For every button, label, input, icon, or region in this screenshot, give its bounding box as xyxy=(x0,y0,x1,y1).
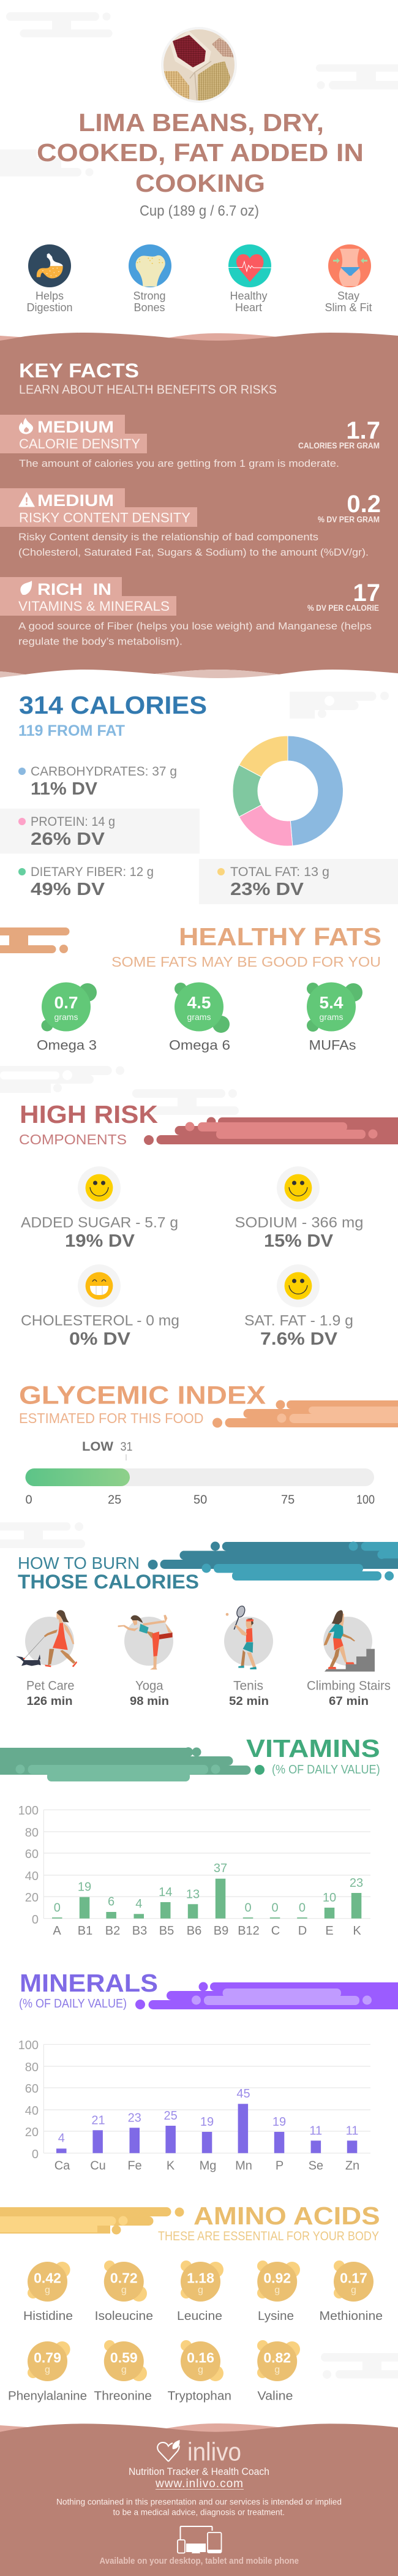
icon: leaf xyxy=(20,581,32,595)
benefit: stay slim and fit xyxy=(325,244,372,314)
heading: calories: 314 CALORIES xyxy=(19,691,207,719)
bar chart: vitamins: 37 xyxy=(214,1862,227,1875)
fact: calorie density: 1.7 xyxy=(346,417,380,444)
title: COOKED, FAT ADDED IN xyxy=(37,138,364,167)
legend: dietary fiber xyxy=(18,865,154,899)
bar chart: minerals: P xyxy=(276,2159,283,2173)
glycemic index gauge: 25 xyxy=(108,1494,121,1507)
section header: vitamins xyxy=(0,1734,380,1781)
bar chart: vitamins: 19 xyxy=(78,1881,91,1894)
title: COOKING xyxy=(135,169,265,197)
legend: dietary fiber: DIETARY FIBER: 12 g xyxy=(31,865,154,879)
amino acid: lysine xyxy=(257,2261,300,2323)
amino acid: tryptophan: 0.16 xyxy=(187,2350,214,2366)
risk: added sugar xyxy=(21,1166,178,1251)
amino acid: isoleucine: 0.72 xyxy=(110,2270,138,2286)
fact: rich in vitamins and minerals: regulate the body’s metabolism). xyxy=(18,636,182,647)
benefit: helps digestion xyxy=(26,244,73,314)
amino acid: leucine: 1.18 xyxy=(187,2270,214,2286)
risk: added sugar: ADDED SUGAR - 5.7 g xyxy=(21,1214,178,1231)
bar chart: vitamins: 60 xyxy=(25,1848,39,1861)
activity: tennis: 52 min xyxy=(229,1695,269,1708)
amino acid: lysine: Lysine xyxy=(258,2310,294,2323)
logo wordmark: inlivo xyxy=(187,2438,241,2466)
risk: cholesterol: 0% DV xyxy=(69,1329,131,1349)
title: LIMA BEANS, DRY, xyxy=(78,108,324,137)
glycemic index gauge: 100 xyxy=(356,1494,375,1507)
activity: climbing stairs: Climbing Stairs xyxy=(307,1679,391,1693)
fact: calorie density: The amount of calories you are getting from 1 gram is moderate. xyxy=(19,458,339,469)
legend: protein: PROTEIN: 14 g xyxy=(31,815,115,829)
fat: omega 3: 0.7 xyxy=(54,993,78,1012)
benefit: helps digestion: Helps xyxy=(36,290,64,302)
amino acid: phenylalanine: 0.79 xyxy=(34,2350,61,2366)
amino acid: isoleucine: g xyxy=(121,2285,127,2295)
section header: high risk components: COMPONENTS xyxy=(19,1131,127,1147)
risk: cholesterol xyxy=(21,1264,179,1349)
glycemic index gauge: LOW xyxy=(82,1440,113,1454)
bar chart: minerals: 19 xyxy=(200,2115,214,2129)
risk: sodium xyxy=(235,1166,364,1251)
fact: calorie density: MEDIUM xyxy=(37,418,114,436)
legend: protein: 26% DV xyxy=(31,829,105,849)
section header: glycemic index: ESTIMATED FOR THIS FOOD xyxy=(19,1410,203,1426)
legend: carbohydrates: 11% DV xyxy=(31,779,98,799)
title xyxy=(37,108,364,197)
activity: yoga xyxy=(118,1615,173,1708)
bar chart: vitamins: 0 xyxy=(244,1902,252,1915)
section header: amino acids xyxy=(0,2202,380,2243)
bar chart: vitamins: 4 xyxy=(135,1897,142,1911)
section header: high risk components: HIGH RISK xyxy=(20,1100,158,1128)
benefit: healthy heart: Heart xyxy=(235,301,262,314)
amino acid: leucine xyxy=(177,2261,223,2323)
fact: risky content density: (Cholesterol, Saturated Fat, Sugars & Sodium) to the amount (%DV/gr). xyxy=(18,546,369,558)
bar chart: vitamins: E xyxy=(325,1924,334,1938)
heading: key facts: KEY FACTS xyxy=(19,360,139,382)
bar chart: vitamins: 14 xyxy=(159,1886,172,1899)
bar chart: minerals: 100 xyxy=(18,2039,39,2052)
glycemic index gauge: 50 xyxy=(193,1494,207,1507)
glycemic index gauge: 75 xyxy=(281,1494,295,1507)
bar chart: vitamins: 100 xyxy=(18,1804,39,1818)
bar chart: vitamins: B6 xyxy=(187,1924,201,1938)
bar chart: minerals: K xyxy=(167,2159,175,2173)
activity: climbing stairs: 67 min xyxy=(329,1695,369,1708)
bar chart: vitamins: C xyxy=(271,1924,280,1938)
bar chart: vitamins: 0 xyxy=(32,1913,39,1927)
bar chart: vitamins: B1 xyxy=(78,1924,92,1938)
bar chart: minerals: 20 xyxy=(25,2126,39,2139)
icon: devices xyxy=(178,2526,222,2553)
amino acid: valine: g xyxy=(274,2365,280,2375)
fact: risky content density: Risky Content density is the relationship of bad components xyxy=(18,531,318,543)
fact: rich in vitamins and minerals xyxy=(0,577,380,647)
fat: omega 6: 4.5 xyxy=(187,993,211,1012)
bar chart: vitamins: B12 xyxy=(238,1924,260,1938)
activity: climbing stairs xyxy=(307,1610,391,1708)
section header: glycemic index xyxy=(19,1380,398,1427)
risk: cholesterol: CHOLESTEROL - 0 mg xyxy=(21,1313,179,1329)
bar chart: minerals xyxy=(18,2039,370,2173)
amino acid: methionine: 0.17 xyxy=(340,2270,367,2286)
bar chart: vitamins: A xyxy=(53,1924,61,1938)
fat: omega 6 xyxy=(169,983,230,1052)
fat: omega 6: Omega 6 xyxy=(169,1038,230,1052)
amino acid: histidine: g xyxy=(45,2285,50,2295)
fact: rich in vitamins and minerals: VITAMINS & MINERALS xyxy=(18,599,170,614)
fat: mufas xyxy=(307,983,362,1052)
legend: carbohydrates xyxy=(18,765,177,799)
risk: added sugar: 19% DV xyxy=(65,1231,135,1251)
bar chart: minerals: Zn xyxy=(345,2159,359,2173)
amino acid: leucine: Leucine xyxy=(177,2310,222,2323)
benefit: healthy heart xyxy=(228,244,271,314)
fact: rich in vitamins and minerals: 17 xyxy=(353,580,380,606)
legend: total fat: 23% DV xyxy=(230,880,304,899)
fat: omega 3: grams xyxy=(54,1012,78,1022)
risk: saturated fat xyxy=(244,1264,353,1349)
section header: how to burn those calories: HOW TO BURN xyxy=(18,1554,140,1573)
tagline: Nutrition Tracker & Health Coach xyxy=(129,2466,269,2477)
legend: dietary fiber: 49% DV xyxy=(31,880,105,899)
bar chart: minerals: Mn xyxy=(235,2159,252,2173)
bar chart: vitamins: D xyxy=(298,1924,307,1938)
risk: sodium: 15% DV xyxy=(264,1231,334,1251)
benefit: strong bones: Strong xyxy=(133,290,166,302)
legend: protein xyxy=(0,809,200,854)
amino acid: tryptophan xyxy=(168,2340,231,2403)
amino acid: lysine: g xyxy=(274,2285,280,2295)
activity: tennis: Tenis xyxy=(233,1679,263,1693)
bar chart: vitamins: 80 xyxy=(25,1826,39,1840)
legend: total fat: TOTAL FAT: 13 g xyxy=(230,865,329,879)
amino acid: isoleucine xyxy=(95,2261,153,2323)
glycemic index gauge xyxy=(26,1440,375,1507)
activity: yoga: Yoga xyxy=(135,1679,163,1693)
website link: www.inlivo.com xyxy=(155,2477,243,2490)
fact: rich in vitamins and minerals: RICH IN xyxy=(37,580,111,599)
fact: risky content density xyxy=(0,488,381,558)
amino acid: threonine: 0.59 xyxy=(110,2350,138,2366)
fact: risky content density: RISKY CONTENT DENSITY xyxy=(19,510,190,526)
activity: yoga: 98 min xyxy=(130,1695,169,1708)
icon: warning triangle xyxy=(18,492,35,507)
icon: smile xyxy=(86,1174,113,1201)
bar chart: vitamins: 20 xyxy=(25,1891,39,1905)
donut chart xyxy=(233,736,343,846)
amino acid: histidine: Histidine xyxy=(23,2310,73,2323)
amino acid: methionine xyxy=(320,2261,383,2323)
footer panel xyxy=(0,2423,398,2576)
bar chart: minerals: 60 xyxy=(25,2082,39,2096)
amino acid: valine xyxy=(257,2340,300,2403)
risk: sodium: SODIUM - 366 mg xyxy=(235,1214,364,1231)
bar chart: minerals: 23 xyxy=(128,2111,141,2125)
section header: healthy fats: HEALTHY FATS xyxy=(179,923,381,951)
icon: flame xyxy=(19,418,33,434)
amino acid: methionine: g xyxy=(351,2285,356,2295)
fact: risky content density: % DV PER GRAM xyxy=(318,515,380,524)
serving size: Cup (189 g / 6.7 oz) xyxy=(140,203,259,219)
activity: pet care: 126 min xyxy=(27,1695,72,1708)
glycemic index gauge: 31 xyxy=(120,1440,132,1454)
legend: carbohydrates: CARBOHYDRATES: 37 g xyxy=(31,765,177,779)
bar chart: minerals: 45 xyxy=(236,2087,250,2101)
amino acid: valine: Valine xyxy=(257,2389,293,2403)
bar chart: vitamins: B5 xyxy=(159,1924,174,1938)
amino acid: histidine: 0.42 xyxy=(34,2270,61,2286)
fat: mufas: 5.4 xyxy=(320,993,344,1012)
section header: how to burn those calories xyxy=(18,1541,398,1593)
fact: risky content density: 0.2 xyxy=(347,491,381,518)
section header: minerals: (% OF DAILY VALUE) xyxy=(19,1997,127,2011)
amino acid: isoleucine: Isoleucine xyxy=(95,2310,153,2323)
bar chart: minerals: 4 xyxy=(58,2132,65,2145)
benefit: stay slim and fit: Stay xyxy=(337,290,359,302)
bar chart: minerals: Fe xyxy=(127,2159,142,2173)
bar chart: minerals: 80 xyxy=(25,2061,39,2074)
availability note: Available on your desktop, tablet and mobile phone xyxy=(99,2556,299,2566)
fat: omega 6: grams xyxy=(187,1012,211,1022)
benefit: stay slim and fit: Slim & Fit xyxy=(325,301,372,314)
fact: risky content density: MEDIUM xyxy=(37,491,114,510)
bar chart: vitamins: 10 xyxy=(323,1891,336,1905)
amino acid: leucine: g xyxy=(198,2285,203,2295)
amino acid: tryptophan: Tryptophan xyxy=(168,2389,231,2403)
section header: vitamins: VITAMINS xyxy=(246,1734,380,1762)
amino acid: histidine xyxy=(23,2262,73,2323)
fat: omega 3 xyxy=(37,983,97,1052)
icon: inlivo heart logo xyxy=(157,2440,180,2461)
fact: rich in vitamins and minerals: % DV PER CALORIE xyxy=(307,603,379,613)
section header: minerals xyxy=(19,1969,398,2011)
section header: how to burn those calories: THOSE CALORIES xyxy=(18,1571,199,1593)
benefit: healthy heart: Healthy xyxy=(230,290,268,302)
bar chart: minerals: Se xyxy=(309,2159,323,2173)
bar chart: vitamins: K xyxy=(353,1924,361,1938)
bar chart: vitamins: 0 xyxy=(54,1902,61,1915)
amino acid: threonine: Threonine xyxy=(94,2389,152,2403)
fat: mufas: grams xyxy=(320,1012,343,1022)
fat: omega 3: Omega 3 xyxy=(37,1038,97,1052)
section header: healthy fats xyxy=(0,923,381,970)
disclaimer: Nothing contained in this presentation and our services is intended or implied xyxy=(56,2497,342,2507)
icon: smile xyxy=(285,1174,312,1201)
amino acid: phenylalanine xyxy=(8,2341,87,2403)
bar chart: vitamins xyxy=(18,1804,370,1938)
bar chart: minerals: 0 xyxy=(32,2148,39,2161)
bar chart: vitamins: 13 xyxy=(186,1887,200,1901)
risk: saturated fat: 7.6% DV xyxy=(260,1329,338,1349)
section header: vitamins: (% OF DAILY VALUE) xyxy=(272,1763,380,1777)
bar chart: vitamins: B2 xyxy=(105,1924,120,1938)
disclaimer xyxy=(56,2497,342,2517)
fact: calorie density: CALORIE DENSITY xyxy=(19,436,140,451)
bar chart: minerals: 19 xyxy=(272,2115,286,2129)
bar chart: vitamins: 0 xyxy=(299,1902,306,1915)
amino acid: threonine: g xyxy=(121,2365,127,2375)
section header: high risk components xyxy=(19,1100,398,1147)
fat: mufas: MUFAs xyxy=(309,1038,356,1052)
benefit: helps digestion: Digestion xyxy=(26,301,73,314)
bar chart: minerals: 21 xyxy=(91,2113,105,2127)
bar chart: vitamins: B9 xyxy=(214,1924,228,1938)
amino acid: threonine xyxy=(94,2340,152,2403)
panel: key facts xyxy=(0,333,398,678)
header photo: bags of beans xyxy=(161,27,237,103)
activity: pet care: Pet Care xyxy=(26,1679,75,1693)
amino acid: methionine: Methionine xyxy=(320,2310,383,2323)
amino acid: lysine: 0.92 xyxy=(263,2270,291,2286)
bar chart: minerals: 11 xyxy=(346,2125,358,2138)
bar chart: minerals: Ca xyxy=(54,2159,70,2173)
section header: amino acids: AMINO ACIDS xyxy=(193,2202,380,2230)
disclaimer: to be a medical advice, diagnosis or treatment. xyxy=(113,2507,285,2517)
icon: grin xyxy=(86,1272,113,1299)
amino acid: valine: 0.82 xyxy=(263,2350,291,2366)
section header: minerals: MINERALS xyxy=(20,1969,158,1997)
bar chart: vitamins: 0 xyxy=(271,1902,279,1915)
amino acid: tryptophan: g xyxy=(198,2365,203,2375)
fact: rich in vitamins and minerals: A good source of Fiber (helps you lose weight) and Manganese (helps xyxy=(18,620,372,632)
subheading: LEARN ABOUT HEALTH BENEFITS OR RISKS xyxy=(19,383,277,397)
benefit: strong bones xyxy=(129,244,171,314)
bar chart: minerals: 25 xyxy=(163,2109,178,2123)
bar chart: vitamins: B3 xyxy=(132,1924,147,1938)
fact: calorie density xyxy=(0,415,380,469)
bar chart: vitamins: 40 xyxy=(25,1870,39,1883)
section header: glycemic index: GLYCEMIC INDEX xyxy=(19,1380,266,1409)
bar chart: minerals: Mg xyxy=(200,2159,216,2173)
fact: calorie density: CALORIES PER GRAM xyxy=(298,441,380,450)
amino acid: phenylalanine: g xyxy=(45,2365,50,2375)
legend: total fat xyxy=(199,859,398,904)
amino acid: phenylalanine: Phenylalanine xyxy=(8,2389,87,2403)
benefit: strong bones: Bones xyxy=(133,301,165,314)
bar chart: minerals: 11 xyxy=(309,2125,322,2138)
bar chart: vitamins: 6 xyxy=(108,1895,115,1909)
bar chart: minerals: Cu xyxy=(90,2159,106,2173)
risk: saturated fat: SAT. FAT - 1.9 g xyxy=(244,1313,353,1329)
bar chart: vitamins: 23 xyxy=(350,1876,363,1890)
bar chart: minerals: 40 xyxy=(25,2104,39,2118)
section header: healthy fats: SOME FATS MAY BE GOOD FOR YOU xyxy=(111,954,381,970)
glycemic index gauge: 0 xyxy=(26,1494,32,1507)
activity: tennis xyxy=(224,1605,273,1708)
icon: smile xyxy=(285,1272,312,1299)
subheading: from fat: 119 FROM FAT xyxy=(18,722,125,739)
activity: pet care xyxy=(16,1610,77,1708)
